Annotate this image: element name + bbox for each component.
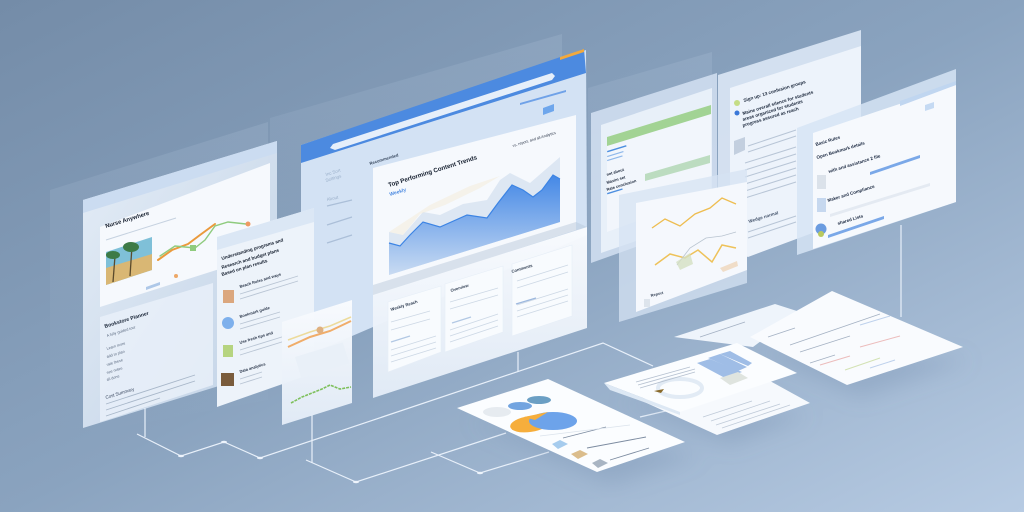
list row icons — [223, 290, 234, 303]
panel: green table window — [591, 73, 717, 263]
panel: list window: Data analytics — [239, 361, 267, 374]
document text lines — [742, 79, 814, 128]
panel: list window: Use fresh tips and — [239, 330, 274, 345]
panel: right progress window — [797, 69, 956, 255]
panel: left analytics window: Learn more — [106, 341, 126, 351]
floor panel: back documents — [674, 291, 963, 385]
column 3 — [512, 245, 572, 336]
area chart: cream highlight — [389, 176, 500, 235]
sidebar labels: Settings — [325, 173, 343, 183]
sidebar labels: About — [326, 194, 339, 202]
line chart — [158, 222, 250, 278]
column 2 — [445, 266, 503, 352]
panel: left analytics window: add to plan — [106, 350, 125, 359]
list icons and lines — [552, 440, 568, 449]
floor panel: lower list — [640, 370, 810, 435]
document text lines: Sign up: 13 confusion groups — [743, 79, 807, 103]
chart subheading: Weekly — [389, 187, 407, 198]
panel: left analytics window: A fully guided tour — [106, 325, 137, 338]
panel: green table window: net about — [606, 167, 625, 177]
panel: list window: Beach Rules and ways — [239, 271, 282, 289]
panel: lower three column card: Overview — [450, 283, 470, 293]
panel: left analytics window: Bookstore Planner — [104, 311, 150, 330]
card heading: Nurse Anywhere — [105, 211, 151, 230]
panel: left analytics window: rate these — [106, 358, 123, 367]
panel: right progress window: Open Bookmark details — [816, 140, 866, 160]
chart caption: vs. report, and all Analytics — [512, 131, 557, 148]
address bar — [330, 73, 555, 150]
green header bar — [607, 105, 711, 146]
panel: right progress window: Basic Rules — [815, 135, 841, 147]
panel: right document window: Wedge normal — [748, 210, 779, 224]
panel: list window: Understanding programs and — [221, 237, 284, 261]
lower card — [100, 283, 213, 422]
panel: left analytics window — [83, 141, 277, 428]
panel: green table window: Rate conclusion — [606, 178, 637, 192]
panel: list window: Based on plan results — [221, 258, 268, 277]
orange tab — [560, 49, 584, 60]
panel: list window: Research and budget plans — [221, 248, 280, 270]
green progress band — [645, 155, 710, 181]
floor panel: gauge and bars — [604, 343, 797, 415]
pie chart — [509, 413, 551, 435]
top white card — [100, 163, 270, 307]
panel: right progress window: Maker and Compliance — [827, 184, 876, 203]
progress bars — [870, 155, 920, 175]
panel: right progress window: shared Lists — [837, 213, 864, 226]
document text lines: Maine overall silence for students — [742, 89, 814, 116]
panel: small chart window — [282, 300, 352, 425]
panel: lower three column card — [373, 222, 587, 398]
panel: main chart card — [369, 115, 576, 296]
area chart: blue series — [389, 175, 560, 275]
section tag: Recommended — [369, 152, 399, 166]
chart heading: Top Performing Content Trends — [387, 154, 479, 189]
sidebar labels: Inc Sort — [325, 167, 342, 177]
panel: list window: Bookmark guide — [239, 305, 271, 319]
column 1 — [388, 286, 441, 372]
document text lines: progress assured as reach — [742, 106, 799, 128]
panel: left analytics window: all done — [106, 374, 120, 382]
photo — [106, 237, 152, 285]
small pies — [508, 402, 532, 410]
sidebar labels — [325, 167, 343, 202]
panel: lower three column card: Comments — [511, 263, 534, 274]
area chart: light back band — [389, 157, 560, 275]
small blue button — [543, 104, 554, 115]
panel: list window — [217, 208, 314, 407]
panel: right document window — [718, 30, 861, 262]
card sublabel — [106, 218, 176, 240]
document text lines: areas organized for students — [742, 99, 804, 122]
panel: lower three column card: Weekly Reach — [390, 299, 419, 312]
panel: green table window: Maxim set — [606, 174, 626, 185]
panel: left analytics window: see notes — [106, 366, 123, 375]
blue progress accent — [520, 90, 566, 105]
panel: browser window — [301, 49, 587, 358]
connector lines — [137, 225, 901, 483]
illustration group — [50, 30, 970, 485]
floor panel: pie charts and list — [457, 379, 685, 472]
floor shadows — [470, 350, 970, 485]
panel: yellow line chart window: Report — [650, 290, 664, 298]
panel: right progress window: with and assistance 2 file — [827, 153, 881, 174]
panel: left analytics window: Cost Summary — [105, 386, 135, 400]
browser title bar — [301, 49, 586, 163]
ghost backdrop panels — [50, 34, 712, 440]
panel: yellow line chart window — [619, 169, 747, 322]
